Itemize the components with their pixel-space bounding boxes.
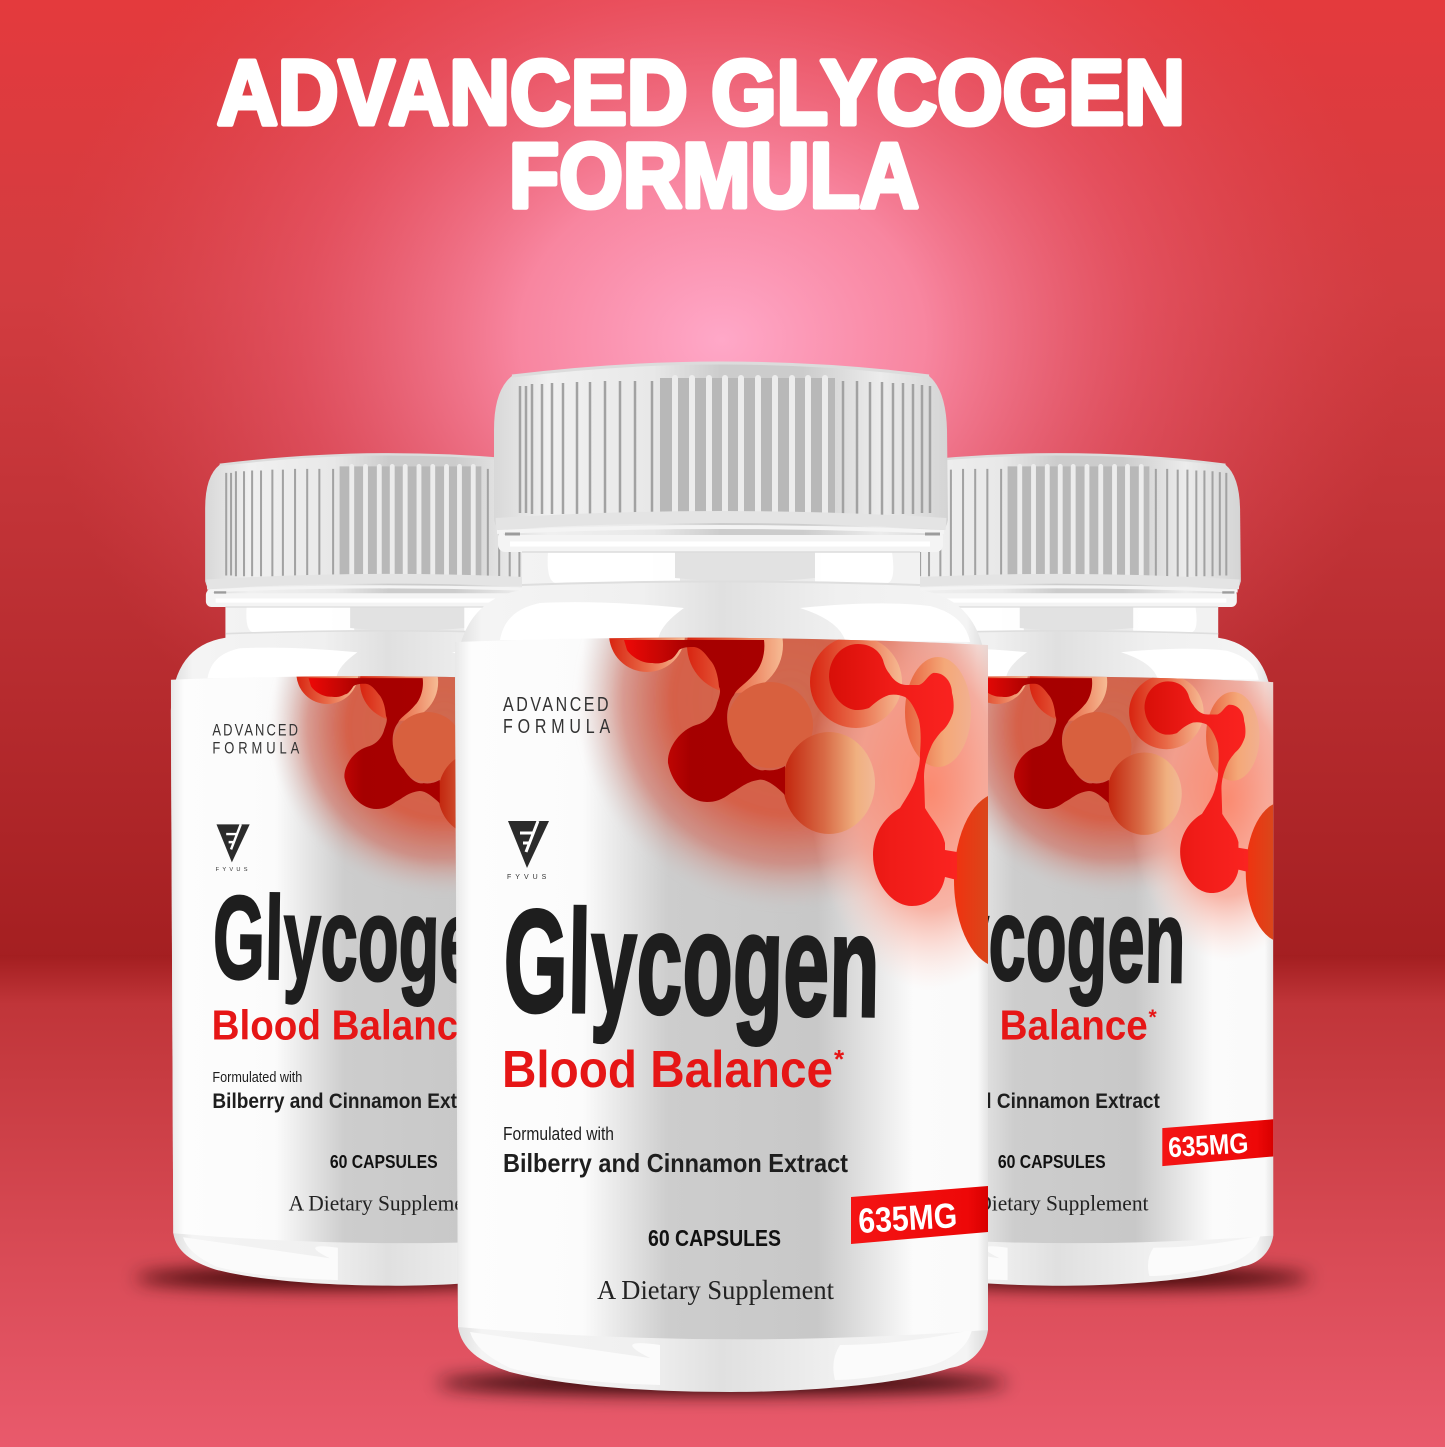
- advanced formula tagline: FORMULA: [503, 715, 611, 737]
- right bottle label text: Blood Balance: [880, 1001, 1148, 1048]
- left bottle label text: FORMULA: [212, 740, 299, 758]
- left bottle label text: A Dietary Supplement: [289, 1192, 481, 1216]
- title: ADVANCED GLYCOGEN: [217, 42, 1185, 144]
- dietary supplement line: A Dietary Supplement: [597, 1275, 834, 1305]
- right bottle label text: *: [1149, 1006, 1158, 1029]
- ingredients: Bilberry and Cinnamon Extract: [503, 1148, 848, 1178]
- advanced formula tagline: ADVANCED: [503, 693, 609, 715]
- ingredients: [503, 1124, 848, 1178]
- shadow: left bottle: [135, 1268, 535, 1288]
- left bottle label text: Blood Balance: [212, 1001, 480, 1048]
- center bottle label text: [502, 693, 988, 1305]
- icon: FYVUS logo: FYVUS: [507, 874, 550, 881]
- left bottle label text: FYVUS: [216, 867, 251, 873]
- left bottle body: [171, 589, 605, 1286]
- right bottle: [838, 454, 1320, 1286]
- title: FORMULA: [509, 125, 919, 227]
- left bottle label text: Glycogen: [212, 872, 518, 1008]
- product subtitle: *: [834, 1044, 845, 1074]
- background: red studio wall: [0, 0, 1445, 980]
- title: [217, 42, 1185, 227]
- left bottle label text: Bilberry and Cinnamon Extract: [212, 1090, 492, 1113]
- right bottle label text: Glycogen: [880, 872, 1186, 1008]
- left bottle cap: [205, 454, 573, 593]
- left bottle label text: 60 CAPSULES: [330, 1151, 438, 1172]
- left bottle label text: Formulated with: [212, 1070, 302, 1086]
- left bottle: [167, 454, 652, 1286]
- product subtitle: Blood Balance: [502, 1041, 833, 1099]
- background: floor: [0, 955, 1445, 1447]
- product name: Glycogen: [503, 879, 881, 1047]
- background: pink spotlight: [0, 0, 1445, 980]
- right bottle label text: Bilberry and Cinnamon Extract: [880, 1090, 1160, 1113]
- left bottle label text: ADVANCED: [212, 722, 298, 740]
- left bottle label artwork: [167, 643, 652, 1256]
- shadow: right bottle: [910, 1268, 1310, 1288]
- center bottle: [450, 363, 1046, 1392]
- right bottle label text: 60 CAPSULES: [998, 1151, 1106, 1172]
- capsule count: 60 CAPSULES: [648, 1225, 781, 1251]
- right bottle label text: [880, 872, 1273, 1216]
- icon: FYVUS logo: [507, 821, 550, 881]
- ingredients: Formulated with: [503, 1124, 614, 1144]
- left bottle label text: *: [481, 1006, 490, 1029]
- right bottle label text: A Dietary Supplement: [957, 1192, 1149, 1216]
- shadow: center bottle: [437, 1372, 1007, 1394]
- right bottle label text: 635MG: [1167, 1127, 1249, 1163]
- dosage tag: 635MG: [857, 1196, 958, 1241]
- dosage tag: [851, 1186, 988, 1244]
- left bottle label text: [212, 722, 518, 1216]
- advanced formula tagline: [503, 693, 611, 737]
